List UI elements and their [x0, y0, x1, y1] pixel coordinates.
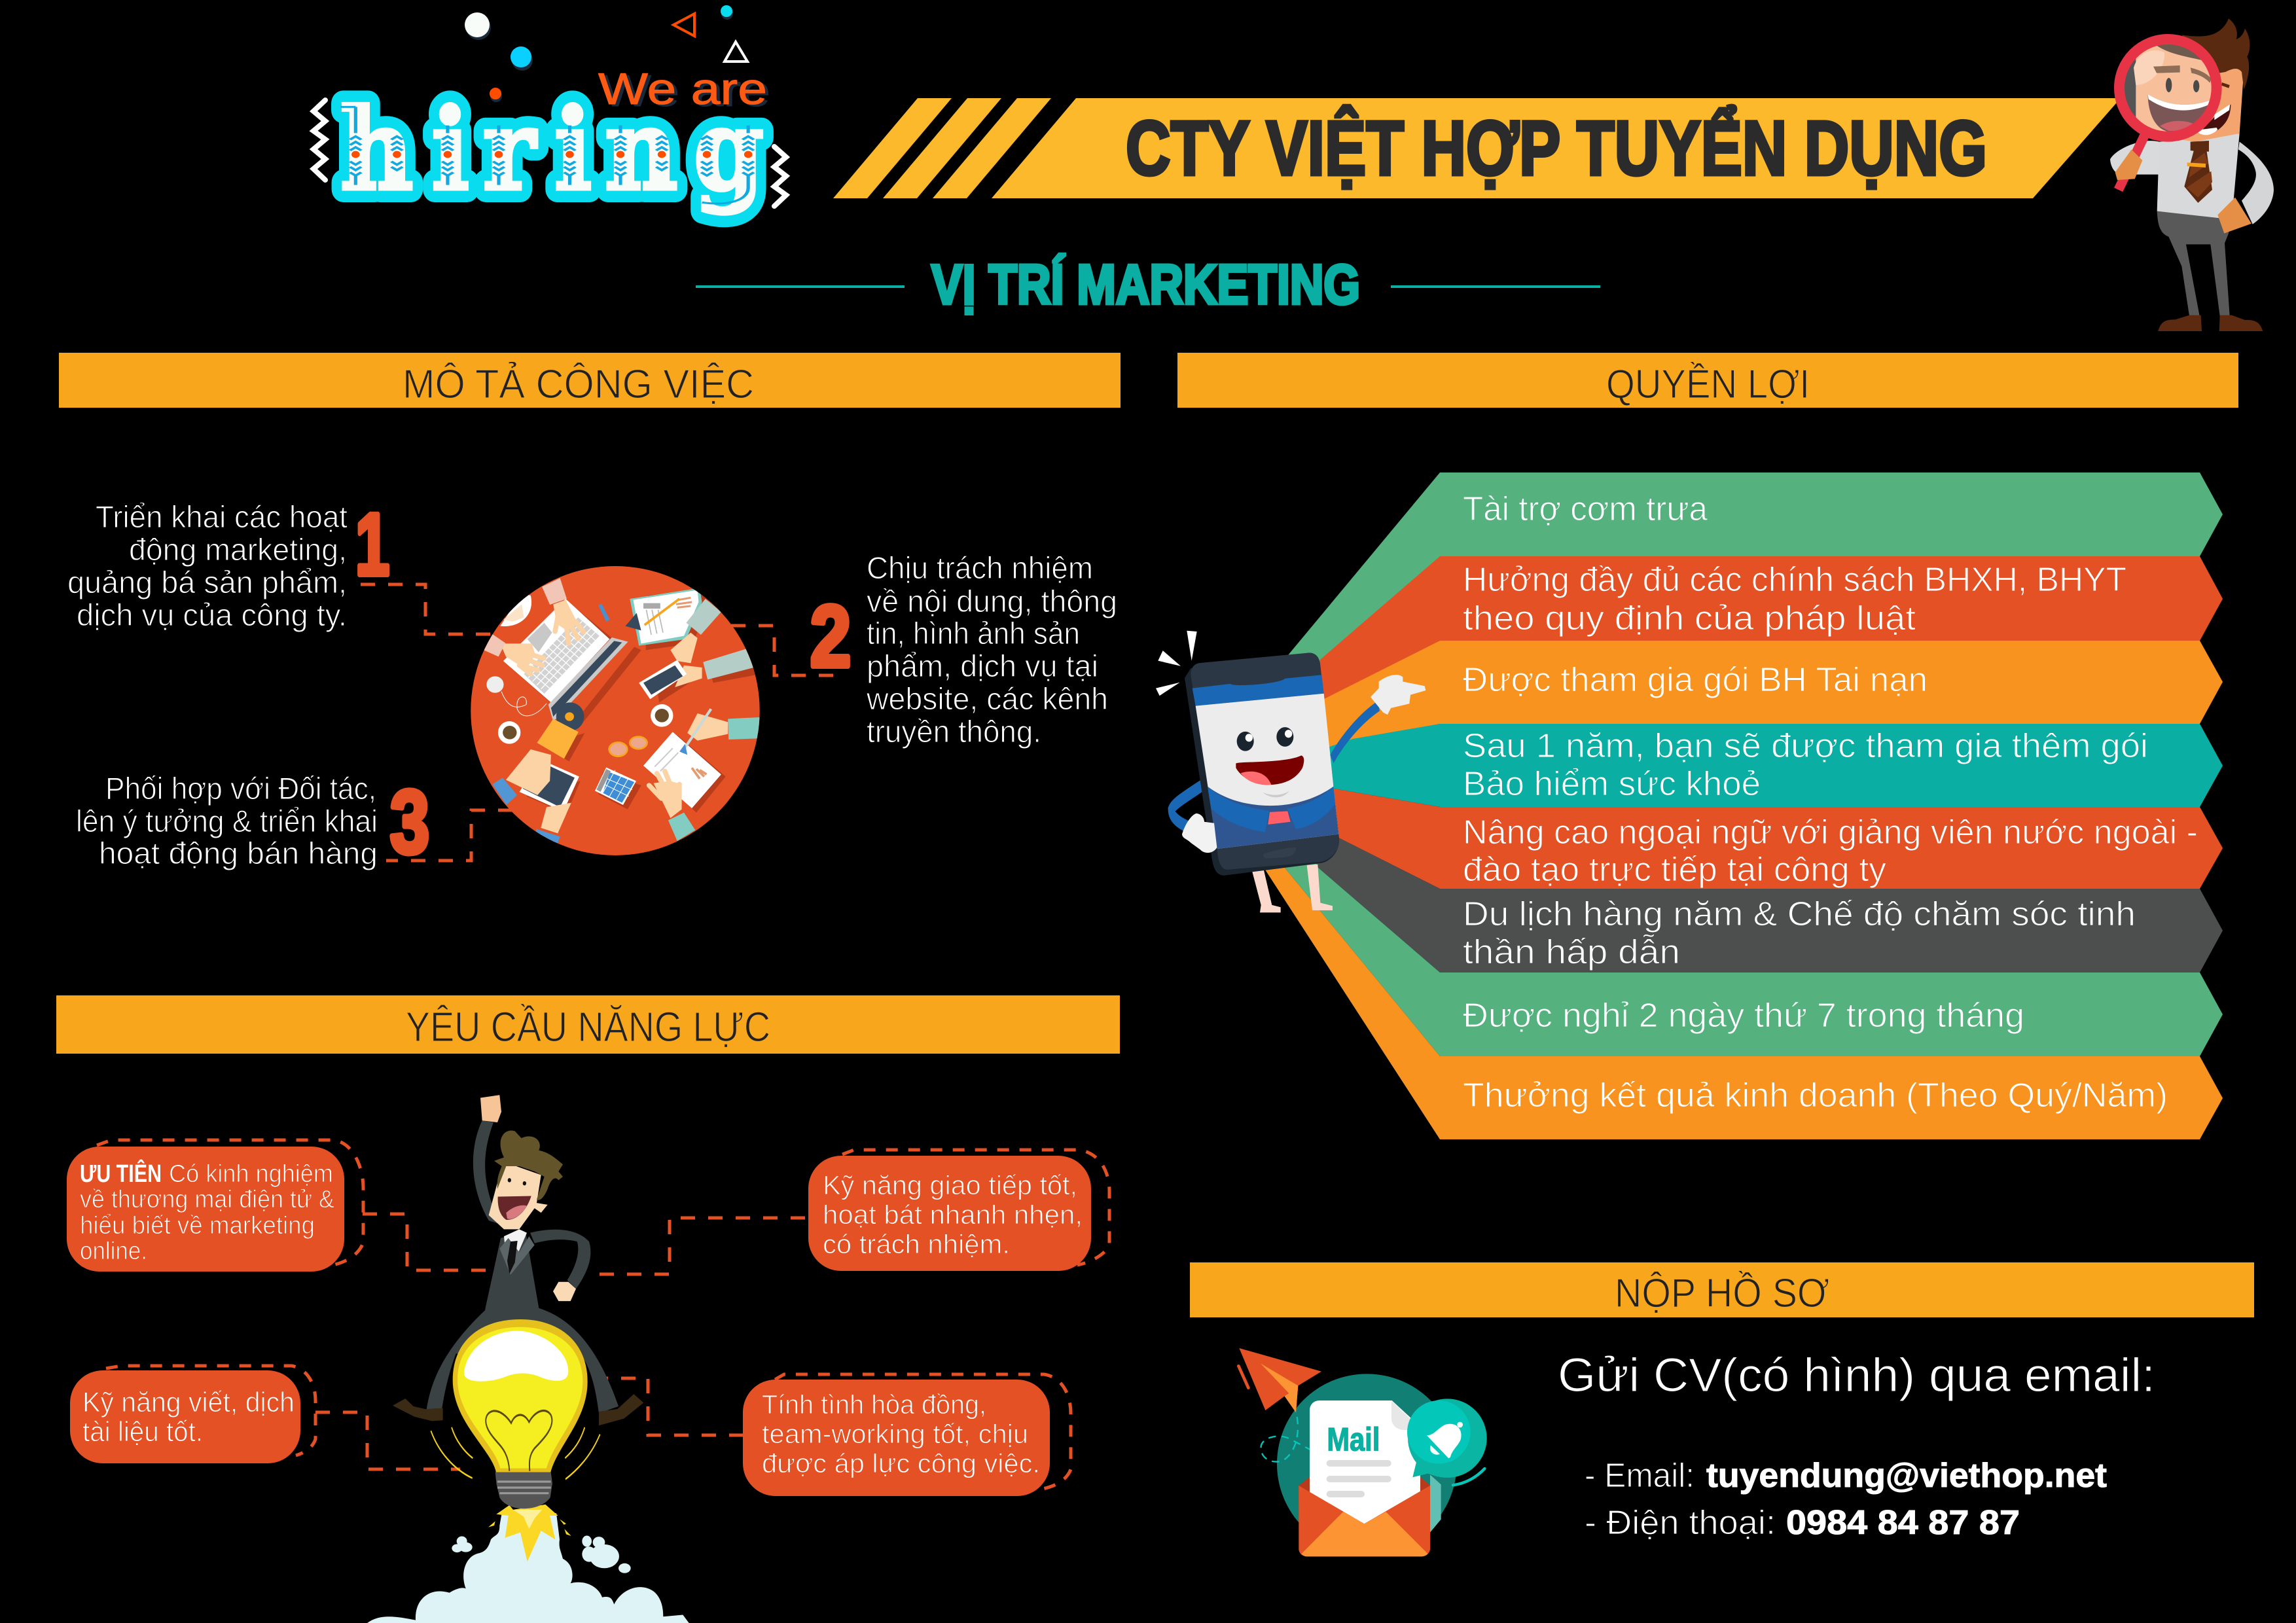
- illustration: team at round table: [471, 566, 761, 855]
- we are text: We are: [598, 64, 767, 114]
- section header: nộp hồ sơ: NỘP HỒ SƠ: [1615, 1271, 1829, 1316]
- box: giao tiếp: Kỹ năng giao tiếp tốt,: [823, 1170, 1077, 1200]
- box: giao tiếp: có trách nhiệm.: [823, 1229, 1010, 1259]
- box: ưu tiên: Có kinh nghiệm: [169, 1160, 333, 1188]
- logo: we are hiring: [314, 5, 786, 216]
- section header: mô tả công việc: MÔ TẢ CÔNG VIỆC: [403, 362, 754, 407]
- benefit labels: Được tham gia gói BH Tai nạn: [1463, 661, 1928, 699]
- section header: quyền lợi: [1177, 353, 2238, 408]
- text block 1: quảng bá sản phẩm,: [67, 565, 347, 599]
- text block 1: Triển khai các hoạt: [96, 499, 348, 534]
- box: giao tiếp: hoạt bát nhanh nhẹn,: [823, 1200, 1083, 1230]
- arms and legs: [427, 1308, 619, 1414]
- text block 2: website, các kênh: [866, 681, 1108, 716]
- panel: contact details: [1558, 1349, 2155, 1542]
- text block 1: [67, 499, 348, 632]
- heading: vị trí marketing: VỊ TRÍ MARKETING: [931, 254, 1360, 316]
- screw base: [495, 1472, 552, 1508]
- benefit labels: thần hấp dẫn: [1463, 933, 1680, 971]
- box: ưu tiên: online.: [80, 1238, 147, 1265]
- illustration: man riding lightbulb rocket: [367, 1095, 689, 1623]
- smoke clouds: [367, 1513, 689, 1623]
- benefit labels: Nâng cao ngoại ngữ với giảng viên nước ngoài -: [1463, 813, 2198, 851]
- box: tính tình: được áp lực công việc.: [762, 1448, 1040, 1478]
- box: kỹ năng viết: [70, 1366, 315, 1463]
- panel: contact details: tuyendung@viethop.net: [1706, 1457, 2107, 1495]
- text block 1: dịch vụ của công ty.: [77, 597, 347, 632]
- panel: benefits: [1156, 473, 2223, 1139]
- mail word: Mail: [1327, 1421, 1380, 1458]
- icon: businessman with magnifier: [2110, 18, 2274, 331]
- box: kỹ năng viết: Kỹ năng viết, dịch: [82, 1387, 295, 1418]
- businessman: [473, 1120, 499, 1224]
- banner: title ribbon: [833, 98, 2121, 198]
- flame: [496, 1505, 558, 1561]
- hiring chevrons: [340, 107, 754, 204]
- text block 3: lên ý tưởng & triển khai: [76, 804, 378, 838]
- text block 2: [866, 550, 1117, 749]
- section header: mô tả công việc: [59, 353, 1121, 408]
- benefit labels: Thưởng kết quả kinh doanh (Theo Quý/Năm): [1463, 1077, 2168, 1115]
- text block 3: hoạt động bán hàng: [99, 836, 378, 870]
- box: tính tình: team-working tốt, chịu: [762, 1419, 1028, 1449]
- text block 2: Chịu trách nhiệm: [867, 550, 1093, 585]
- box: giao tiếp: [808, 1150, 1109, 1271]
- connector dashes: [361, 584, 845, 861]
- benefit labels: Hưởng đầy đủ các chính sách BHXH, BHYT: [1463, 561, 2126, 599]
- panel: competency requirements: [67, 1095, 1109, 1623]
- panel: contact details: Gửi CV(có hình) qua email:: [1558, 1349, 2155, 1402]
- hiring word fill: hiring: [340, 83, 764, 216]
- box: kỹ năng viết: tài liệu tốt.: [82, 1416, 203, 1448]
- panel: contact details: - Email:: [1585, 1457, 1695, 1495]
- bulb: [455, 1323, 585, 1472]
- benefit labels: theo quy định của pháp luật: [1463, 599, 1916, 637]
- benefit labels: Bảo hiểm sức khoẻ: [1463, 765, 1761, 803]
- section header: nộp hồ sơ: [1190, 1262, 2254, 1317]
- text block 3: [76, 771, 378, 870]
- icon: mail envelope: [1238, 1348, 1487, 1556]
- benefit labels: Du lịch hàng năm & Chế độ chăm sóc tinh: [1463, 895, 2136, 933]
- text block 3: Phối hợp với Đối tác,: [105, 771, 376, 806]
- hiring word outline: hiring: [340, 83, 764, 216]
- box: ưu tiên: hiểu biết về marketing: [80, 1212, 315, 1240]
- fan and ribbons: [1265, 473, 2223, 1139]
- text block 2: tin, hình ảnh sản: [867, 616, 1080, 651]
- benefit labels: [1463, 490, 2198, 1115]
- panel: contact details: - Điện thoại:: [1585, 1504, 1776, 1542]
- number 2: 2: [810, 588, 851, 685]
- box: ưu tiên: ƯU TIÊN: [80, 1159, 162, 1188]
- icon: smiling phone mascot: [1156, 631, 1426, 912]
- section header: yêu cầu năng lực: YÊU CẦU NĂNG LỰC: [406, 1003, 770, 1050]
- text block 1: động marketing,: [129, 532, 347, 567]
- text block 2: về nội dung, thông: [867, 584, 1117, 618]
- box: tính tình: [743, 1374, 1071, 1496]
- box: tính tình: Tính tình hòa đồng,: [762, 1389, 986, 1419]
- box: ưu tiên: [67, 1140, 363, 1272]
- benefit labels: Sau 1 năm, bạn sẽ được tham gia thêm gói: [1463, 727, 2148, 765]
- number 3: 3: [390, 772, 429, 872]
- section header: yêu cầu năng lực: [56, 995, 1120, 1054]
- panel: contact details: 0984 84 87 87: [1786, 1504, 2020, 1542]
- connector dashes: [315, 1214, 805, 1469]
- box: ưu tiên: về thương mại điện tử &: [80, 1186, 334, 1213]
- text block 2: truyền thông.: [867, 714, 1041, 749]
- benefit labels: Tài trợ cơm trưa: [1463, 490, 1708, 528]
- title text: CTY VIỆT HỢP TUYỂN DỤNG: [1126, 105, 1987, 192]
- text block 2: phẩm, dịch vụ tại: [867, 649, 1098, 683]
- number 1: 1: [355, 496, 389, 594]
- benefit labels: đào tạo trực tiếp tại công ty: [1463, 851, 1886, 889]
- panel: job description: [67, 496, 1117, 872]
- section header: quyền lợi: QUYỀN LỢI: [1606, 362, 1810, 407]
- benefit labels: Được nghỉ 2 ngày thứ 7 trong tháng: [1463, 997, 2024, 1035]
